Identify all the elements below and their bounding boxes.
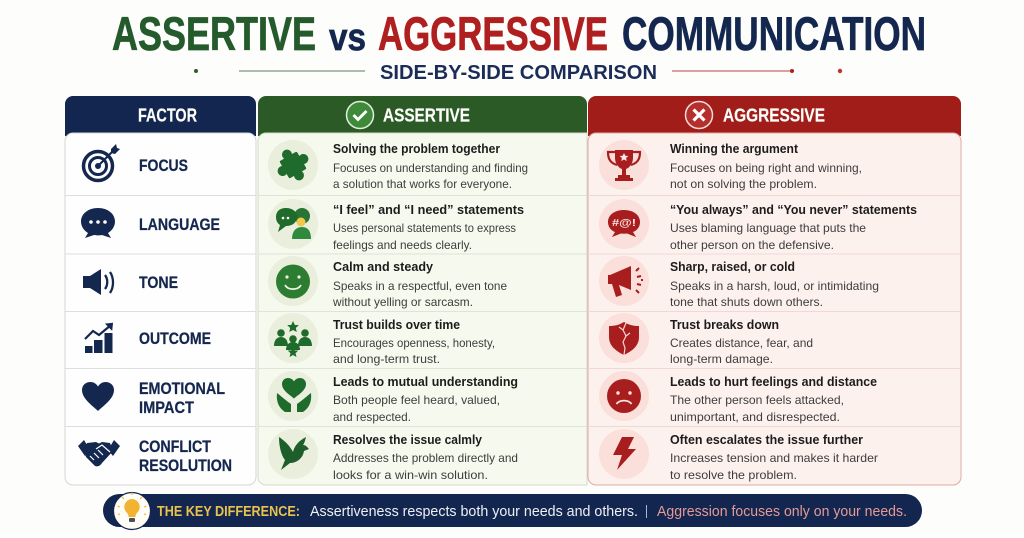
row: aggressive language: Uses blaming language that puts the [670, 221, 866, 235]
factor: conflict resolution [78, 437, 232, 475]
callout: key difference: THE KEY DIFFERENCE: [157, 504, 300, 520]
row: assertive language: feelings and needs clearly. [333, 238, 472, 252]
title [112, 8, 926, 61]
row: assertive tone [268, 256, 507, 309]
factor: language [81, 208, 220, 238]
row: aggressive language: #@! [612, 217, 636, 229]
row: aggressive tone [599, 256, 879, 309]
row: assertive language [268, 199, 524, 252]
callout: key difference: Assertiveness respects both your needs and others. [310, 504, 638, 520]
row: aggressive outcome: Creates distance, fear, and [670, 336, 813, 350]
factor: emotional impact: IMPACT [139, 398, 195, 417]
row: aggressive emotional impact: Leads to hurt feelings and distance [670, 375, 877, 389]
factor: outcome: OUTCOME [139, 329, 211, 348]
row: aggressive focus: not on solving the problem. [670, 177, 817, 191]
row: assertive language: Uses personal statements to express [333, 221, 516, 235]
row: aggressive language [599, 199, 917, 252]
row: assertive tone: Calm and steady [333, 260, 433, 274]
title: AGGRESSIVE [378, 8, 608, 61]
row: assertive tone: Speaks in a respectful, even tone [333, 279, 507, 293]
factor: conflict resolution: RESOLUTION [139, 456, 232, 475]
factor: outcome [85, 323, 211, 353]
row: aggressive language: other person on the defensive. [670, 238, 834, 252]
row: aggressive conflict resolution: Often escalates the issue further [670, 433, 863, 447]
row: aggressive tone: Speaks in a harsh, loud, or intimidating [670, 279, 879, 293]
callout: key difference [103, 492, 922, 530]
row: assertive outcome: Encourages openness, honesty, [333, 336, 495, 350]
row: aggressive focus: Winning the argument [670, 142, 799, 156]
panel: assertive column [258, 96, 587, 485]
row: assertive emotional impact [268, 371, 518, 424]
aggressive header: AGGRESSIVE [723, 104, 825, 126]
assertive header: ASSERTIVE [383, 104, 470, 126]
row: aggressive conflict resolution: to resolve the problem. [670, 468, 797, 482]
row: assertive conflict resolution: Resolves the issue calmly [333, 433, 482, 447]
row: assertive focus: Focuses on understanding and finding [333, 161, 528, 175]
row: aggressive focus: Focuses on being right and winning, [670, 161, 862, 175]
factor: conflict resolution: CONFLICT [139, 437, 212, 456]
row: assertive outcome: Trust builds over time [333, 318, 460, 332]
row: aggressive outcome [599, 313, 813, 366]
factor: tone: TONE [139, 273, 178, 292]
factor header: FACTOR [138, 104, 197, 126]
row: assertive conflict resolution [268, 429, 518, 482]
subtitle: SIDE-BY-SIDE COMPARISON [380, 61, 657, 84]
callout: key difference: Aggression focuses only on your needs. [657, 504, 907, 520]
factor: tone [83, 269, 178, 295]
row: assertive focus [268, 140, 528, 191]
row: assertive focus: Solving the problem together [333, 142, 500, 156]
row: assertive outcome [268, 313, 495, 366]
subtitle [194, 61, 842, 84]
factor: language: LANGUAGE [139, 215, 220, 234]
title: ASSERTIVE [112, 8, 316, 61]
row: aggressive outcome: Trust breaks down [670, 318, 779, 332]
factor: emotional impact: EMOTIONAL [139, 379, 225, 398]
row: aggressive emotional impact: The other person feels attacked, [670, 393, 844, 407]
row: aggressive emotional impact: unimportant, and disrespected. [670, 410, 840, 424]
row: aggressive conflict resolution: Increases tension and makes it harder [670, 451, 878, 465]
row: aggressive language: “You always” and “You never” statements [670, 203, 917, 217]
factor: focus [84, 144, 188, 180]
row: assertive language: “I feel” and “I need” statements [333, 203, 524, 217]
row: assertive outcome: and long-term trust. [333, 352, 440, 366]
panel: aggressive column [588, 96, 961, 485]
title: COMMUNICATION [622, 8, 926, 61]
row: assertive emotional impact: and respected. [333, 410, 411, 424]
row: aggressive tone: tone that shuts down others. [670, 295, 823, 309]
row: aggressive focus [599, 140, 862, 191]
factor: focus: FOCUS [139, 156, 188, 175]
row: aggressive conflict resolution [599, 429, 878, 482]
title: vs [329, 17, 366, 59]
assertive header [346, 102, 470, 128]
row: assertive emotional impact: Both people feel heard, valued, [333, 393, 500, 407]
row: assertive conflict resolution: looks for a win-win solution. [333, 468, 488, 482]
aggressive header [686, 102, 825, 128]
row: assertive tone: without yelling or sarcasm. [332, 295, 473, 309]
row: assertive emotional impact: Leads to mutual understanding [333, 375, 518, 389]
row: aggressive emotional impact [599, 371, 877, 424]
factor: emotional impact [82, 379, 225, 417]
panel: factor column [65, 96, 256, 485]
row: aggressive outcome: long-term damage. [670, 352, 773, 366]
row: assertive conflict resolution: Addresses the problem directly and [333, 451, 518, 465]
row: aggressive tone: Sharp, raised, or cold [670, 260, 795, 274]
icon: light bulb [114, 492, 150, 530]
row: assertive focus: a solution that works for everyone. [333, 177, 512, 191]
